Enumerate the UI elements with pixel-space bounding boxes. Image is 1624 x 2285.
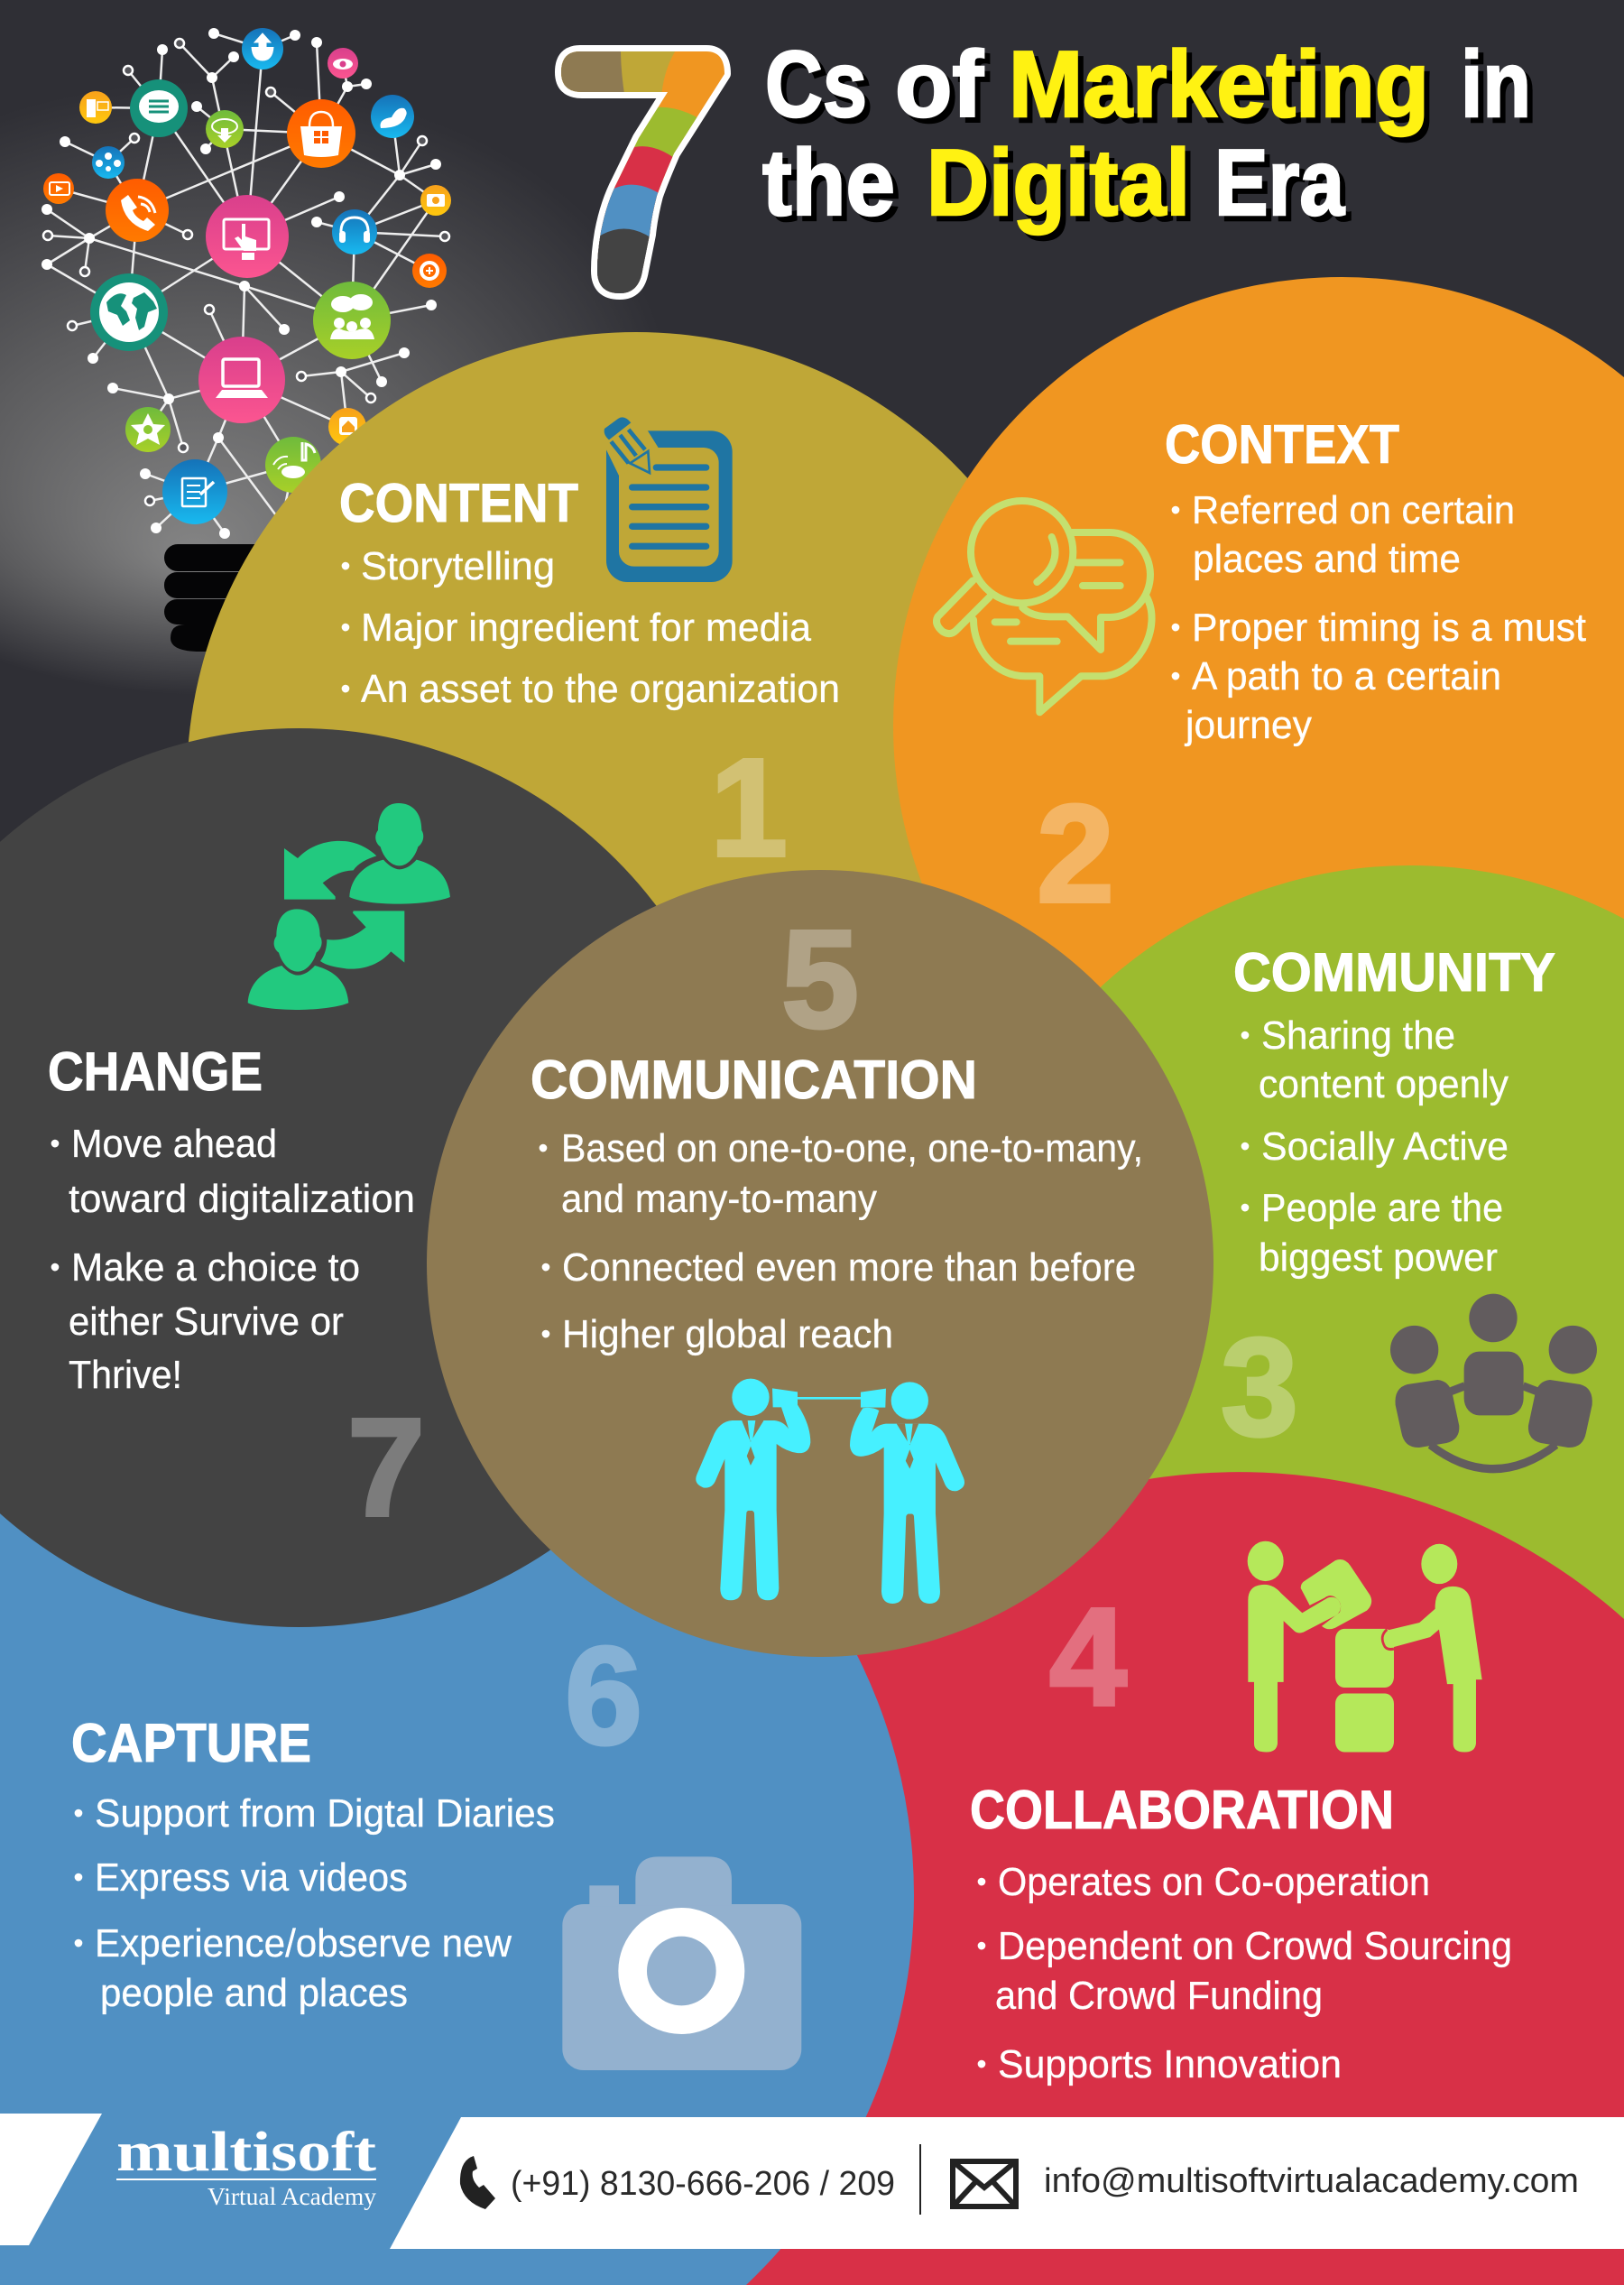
icon: magnifier with speech bubbles (937, 501, 1152, 712)
number 1: 1 (710, 730, 788, 885)
bullet list: Express via videos (95, 1855, 408, 1900)
title: the (762, 131, 895, 236)
bullet list: Sharing the (1261, 1013, 1455, 1058)
number 6: 6 (565, 1618, 642, 1773)
title (762, 32, 1531, 236)
panel: capture (71, 1618, 801, 2070)
footer right white band (390, 2117, 1624, 2249)
phone number: (+91) 8130-666-206 / 209 (511, 2165, 895, 2203)
bullet list: • (73, 1927, 84, 1959)
title: Digital (927, 131, 1190, 236)
bulb base (164, 544, 363, 652)
bullet list: Referred on certain (1192, 488, 1515, 532)
bullet list (73, 1791, 555, 2015)
title: of (895, 32, 983, 137)
bullet list: • (1170, 611, 1181, 643)
bullet list: Proper timing is a must (1192, 606, 1586, 650)
icon: two people stacking blocks (1248, 1541, 1482, 1753)
shape: capture blue (0, 1358, 914, 2285)
logo: Virtual Academy (208, 2183, 376, 2210)
bullet list: and many-to-many (561, 1177, 877, 1221)
bullet list: and Crowd Funding (995, 1974, 1323, 2018)
bullet list: A path to a certain (1192, 654, 1501, 698)
bullet list: • (50, 1251, 60, 1283)
icon: envelope (953, 2161, 1016, 2206)
bullet list: Make a choice to (71, 1245, 360, 1290)
number 3: 3 (1221, 1309, 1298, 1465)
heading: CAPTURE (71, 1713, 311, 1773)
bullet list: • (340, 550, 351, 582)
bullet list: Experience/observe new (95, 1921, 512, 1966)
bullet list: • (976, 1929, 987, 1962)
bullet list: An asset to the organization (361, 667, 840, 711)
bullet list: Higher global reach (562, 1312, 893, 1356)
divider (919, 2144, 921, 2215)
panel: context (937, 414, 1586, 931)
email: info@multisoftvirtualacademy.com (1044, 2162, 1579, 2200)
bullet list: • (1170, 494, 1181, 526)
network icon nodes (43, 28, 451, 524)
bullet list: • (540, 1251, 551, 1283)
logo (116, 2122, 376, 2210)
heading: COMMUNITY (1233, 942, 1555, 1003)
bullet list: Thrive! (69, 1353, 182, 1397)
bullet list: Supports Innovation (998, 2042, 1342, 2086)
bullet list (50, 1122, 415, 1397)
bullet list: journey (1184, 703, 1312, 747)
background glow behind lightbulb (0, 81, 686, 704)
panel: communication (531, 902, 1143, 1604)
bullet list: • (1240, 1019, 1250, 1051)
network dots (42, 28, 441, 539)
bullet list: Socially Active (1261, 1124, 1509, 1169)
circle: change dark (0, 728, 748, 1627)
heading: CONTENT (339, 473, 578, 533)
bullet list: • (340, 611, 351, 643)
bullet list: • (340, 672, 351, 705)
heading: COMMUNICATION (531, 1050, 977, 1110)
heading: CONTEXT (1165, 414, 1399, 475)
title: Marketing (1009, 32, 1429, 137)
bullet list: • (540, 1318, 551, 1350)
bullet list: Move ahead (71, 1122, 277, 1166)
logo: multisoft (116, 2122, 376, 2183)
bullet list: • (1240, 1191, 1250, 1224)
bullet list: biggest power (1259, 1235, 1498, 1280)
bullet list (340, 544, 840, 711)
bullet list: • (1240, 1130, 1250, 1162)
number 4: 4 (1049, 1579, 1127, 1735)
bullet list: Dependent on Crowd Sourcing (998, 1924, 1512, 1968)
title: Cs (765, 32, 867, 137)
circle: content olive (187, 332, 1085, 1231)
icon: phone (460, 2156, 495, 2209)
number 5: 5 (781, 902, 859, 1057)
bullet list: • (976, 2048, 987, 2080)
icon: two people with swap arrows (248, 803, 450, 1010)
bullet list: toward digitalization (69, 1177, 415, 1221)
panel: change (48, 803, 450, 1545)
lightbulb network illustration (42, 28, 451, 652)
bullet list: places and time (1193, 537, 1461, 581)
bullet list: Support from Digtal Diaries (95, 1791, 555, 1836)
bullet list: People are the (1261, 1186, 1503, 1230)
bullet list: Storytelling (361, 544, 555, 588)
bullet list: Connected even more than before (562, 1245, 1136, 1290)
bullet list: Operates on Co-operation (998, 1860, 1430, 1904)
title: Era (1214, 131, 1345, 236)
circle: communication brown (427, 870, 1213, 1657)
number 2: 2 (1037, 776, 1114, 931)
icon: two people on tin can phone (696, 1379, 964, 1604)
bullet list (1240, 1013, 1509, 1280)
bullet list (538, 1126, 1143, 1356)
icon: camera (562, 1856, 801, 2070)
big number seven logo (555, 45, 731, 300)
bullet list: Major ingredient for media (361, 606, 812, 650)
panel: content (339, 417, 840, 885)
panel: community (1221, 942, 1597, 1469)
heading: CHANGE (48, 1041, 263, 1102)
heading: COLLABORATION (970, 1780, 1394, 1840)
title: in (1461, 32, 1531, 137)
bullet list: • (538, 1132, 549, 1164)
bullet list: either Survive or (69, 1300, 344, 1344)
circle: context orange (893, 277, 1624, 1174)
shape: collaboration red (722, 1472, 1624, 2285)
bullet list (976, 1860, 1512, 2086)
bullet list: people and places (100, 1971, 408, 2015)
bullet list: • (1170, 660, 1181, 692)
bullet list: Based on one-to-one, one-to-many, (561, 1126, 1143, 1170)
open network dots (43, 39, 449, 505)
bullet list: • (73, 1861, 84, 1893)
bullet list: • (73, 1797, 84, 1829)
network connections (47, 33, 445, 533)
circle: community green (955, 865, 1624, 1775)
icon: people in circle (1390, 1294, 1597, 1469)
bullet list (1170, 488, 1586, 747)
footer (0, 2114, 1624, 2249)
bullet list: • (50, 1127, 60, 1160)
number 7: 7 (347, 1390, 425, 1545)
footer left white band (0, 2114, 102, 2245)
bullet list: • (976, 1865, 987, 1898)
icon: document with pencil (604, 417, 733, 582)
bullet list: content openly (1259, 1062, 1509, 1106)
panel: collaboration (970, 1541, 1512, 2086)
